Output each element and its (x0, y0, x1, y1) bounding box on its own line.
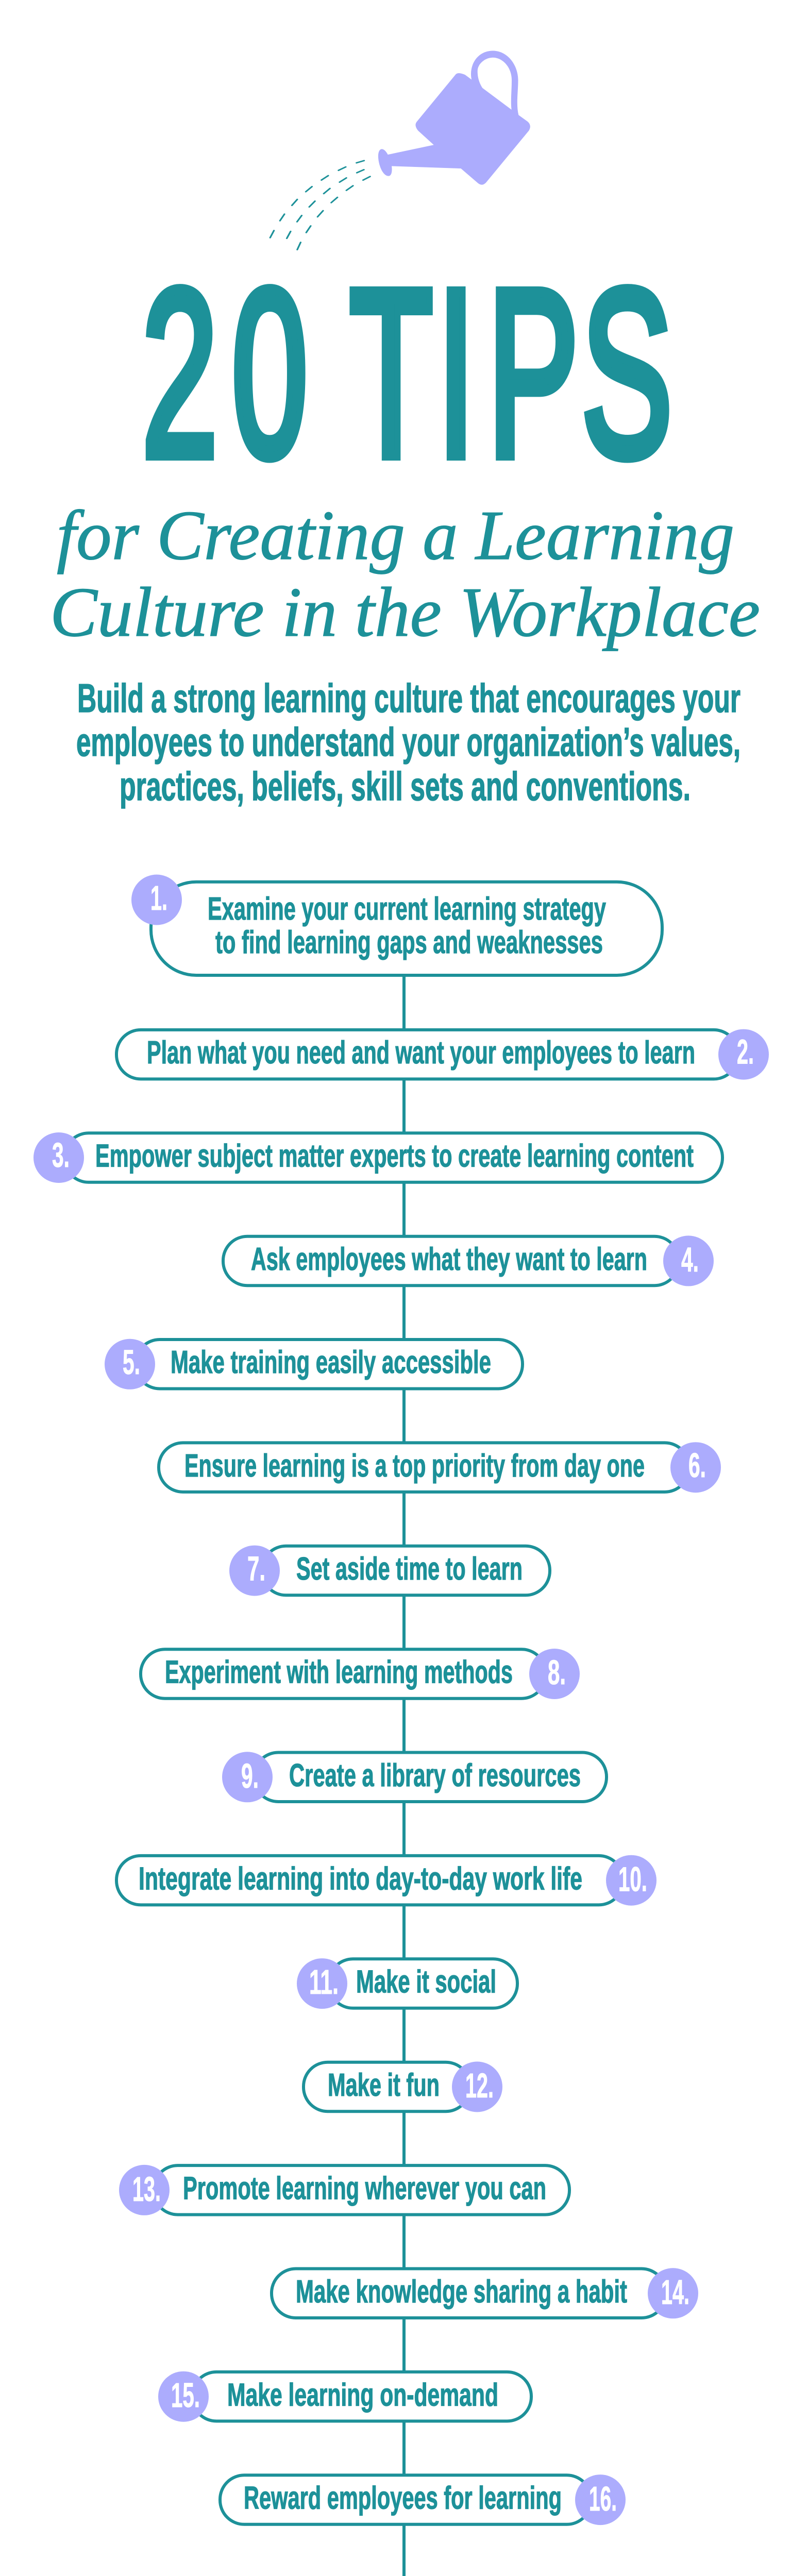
tip 16 (220, 2475, 626, 2525)
number 3: 3. (52, 1136, 70, 1175)
tip 7 text: Set aside time to learn (296, 1551, 523, 1587)
badge 13 (119, 2165, 170, 2215)
pill 10 (116, 1856, 623, 1905)
number 9: 9. (241, 1757, 259, 1795)
number 4: 4. (681, 1241, 699, 1279)
pill 14 (272, 2269, 666, 2318)
pill 9 (254, 1753, 607, 1802)
tip 5 (105, 1339, 523, 1389)
subtitle: Culture in the Workplace (50, 573, 760, 651)
badge 5 (105, 1339, 155, 1389)
subtitle: for Creating a Learning (57, 496, 734, 574)
tip 11 text: Make it social (356, 1964, 496, 2000)
subtitle (50, 496, 760, 651)
badge 1 (131, 875, 182, 925)
pill 7 (262, 1546, 550, 1595)
badge 2 (718, 1029, 769, 1080)
tip 13 text: Promote learning wherever you can (183, 2171, 546, 2206)
tip 8 text: Experiment with learning methods (165, 1655, 513, 1690)
pill 2 (116, 1030, 738, 1079)
tip 14 (272, 2268, 698, 2318)
number 6: 6. (688, 1446, 706, 1485)
pill 1 (151, 882, 662, 975)
tip 7 (229, 1546, 550, 1596)
tip 13 (119, 2165, 569, 2215)
tip 1 (131, 875, 662, 975)
tip 8 (141, 1649, 580, 1699)
tip 11 (297, 1958, 517, 2009)
pill 15 (192, 2372, 531, 2421)
pill 12 (304, 2062, 470, 2111)
badge 3 (33, 1132, 84, 1183)
tip 15 (158, 2371, 531, 2422)
tip 5 text: Make training easily accessible (171, 1345, 491, 1380)
badge 8 (529, 1649, 580, 1699)
tip 10 text: Integrate learning into day-to-day work life (139, 1861, 582, 1896)
tip 1 text: Examine your current learning strategy (208, 891, 606, 927)
number 10: 10. (618, 1860, 647, 1899)
tip 14 text: Make knowledge sharing a habit (296, 2274, 627, 2310)
number 16: 16. (589, 2480, 617, 2518)
pill 13 (154, 2165, 569, 2215)
badge 11 (297, 1958, 347, 2009)
central stem line (402, 974, 406, 2576)
tip 12 text: Make it fun (328, 2067, 440, 2103)
number 15: 15. (171, 2376, 200, 2415)
tip 4 (223, 1235, 714, 1286)
badge 12 (452, 2062, 502, 2112)
tip 10 (116, 1855, 656, 1906)
tip 2 (116, 1029, 769, 1080)
number 7: 7. (247, 1550, 265, 1588)
water drops (270, 161, 370, 250)
pill 11 (329, 1959, 517, 2008)
tip 15 text: Make learning on-demand (227, 2377, 498, 2413)
pill 16 (220, 2475, 591, 2524)
tip 6 (159, 1442, 721, 1493)
badge 10 (606, 1855, 656, 1906)
icon: watering can with water drops (270, 51, 530, 250)
badge 16 (575, 2475, 626, 2525)
pill 6 (159, 1443, 689, 1492)
number 1: 1. (150, 879, 167, 918)
tip 12 (304, 2062, 502, 2112)
icon: watering can (378, 51, 530, 185)
number 5: 5. (123, 1343, 140, 1382)
number 11: 11. (309, 1963, 339, 2002)
badge 6 (670, 1442, 721, 1493)
tip 1 text (208, 891, 606, 960)
tip 9 text: Create a library of resources (289, 1758, 581, 1793)
title: 20 TIPS (142, 240, 672, 506)
tip 1 text: to find learning gaps and weaknesses (215, 925, 603, 960)
pill 4 (223, 1236, 679, 1285)
number 12: 12. (465, 2066, 494, 2105)
badge 15 (158, 2371, 209, 2422)
number 13: 13. (132, 2170, 161, 2209)
badge 14 (648, 2268, 698, 2318)
badge 4 (663, 1235, 714, 1286)
badge 7 (229, 1546, 280, 1596)
intro text block (76, 675, 740, 809)
tip 9 (222, 1752, 607, 1802)
number 14: 14. (661, 2273, 689, 2312)
tip 16 text: Reward employees for learning (244, 2481, 562, 2516)
number 2: 2. (737, 1033, 754, 1072)
pill 8 (141, 1649, 546, 1699)
pill 5 (136, 1340, 523, 1389)
badge 9 (222, 1752, 273, 1802)
number 8: 8. (548, 1653, 566, 1692)
tip 3 (33, 1132, 722, 1183)
pill 3 (64, 1133, 722, 1182)
